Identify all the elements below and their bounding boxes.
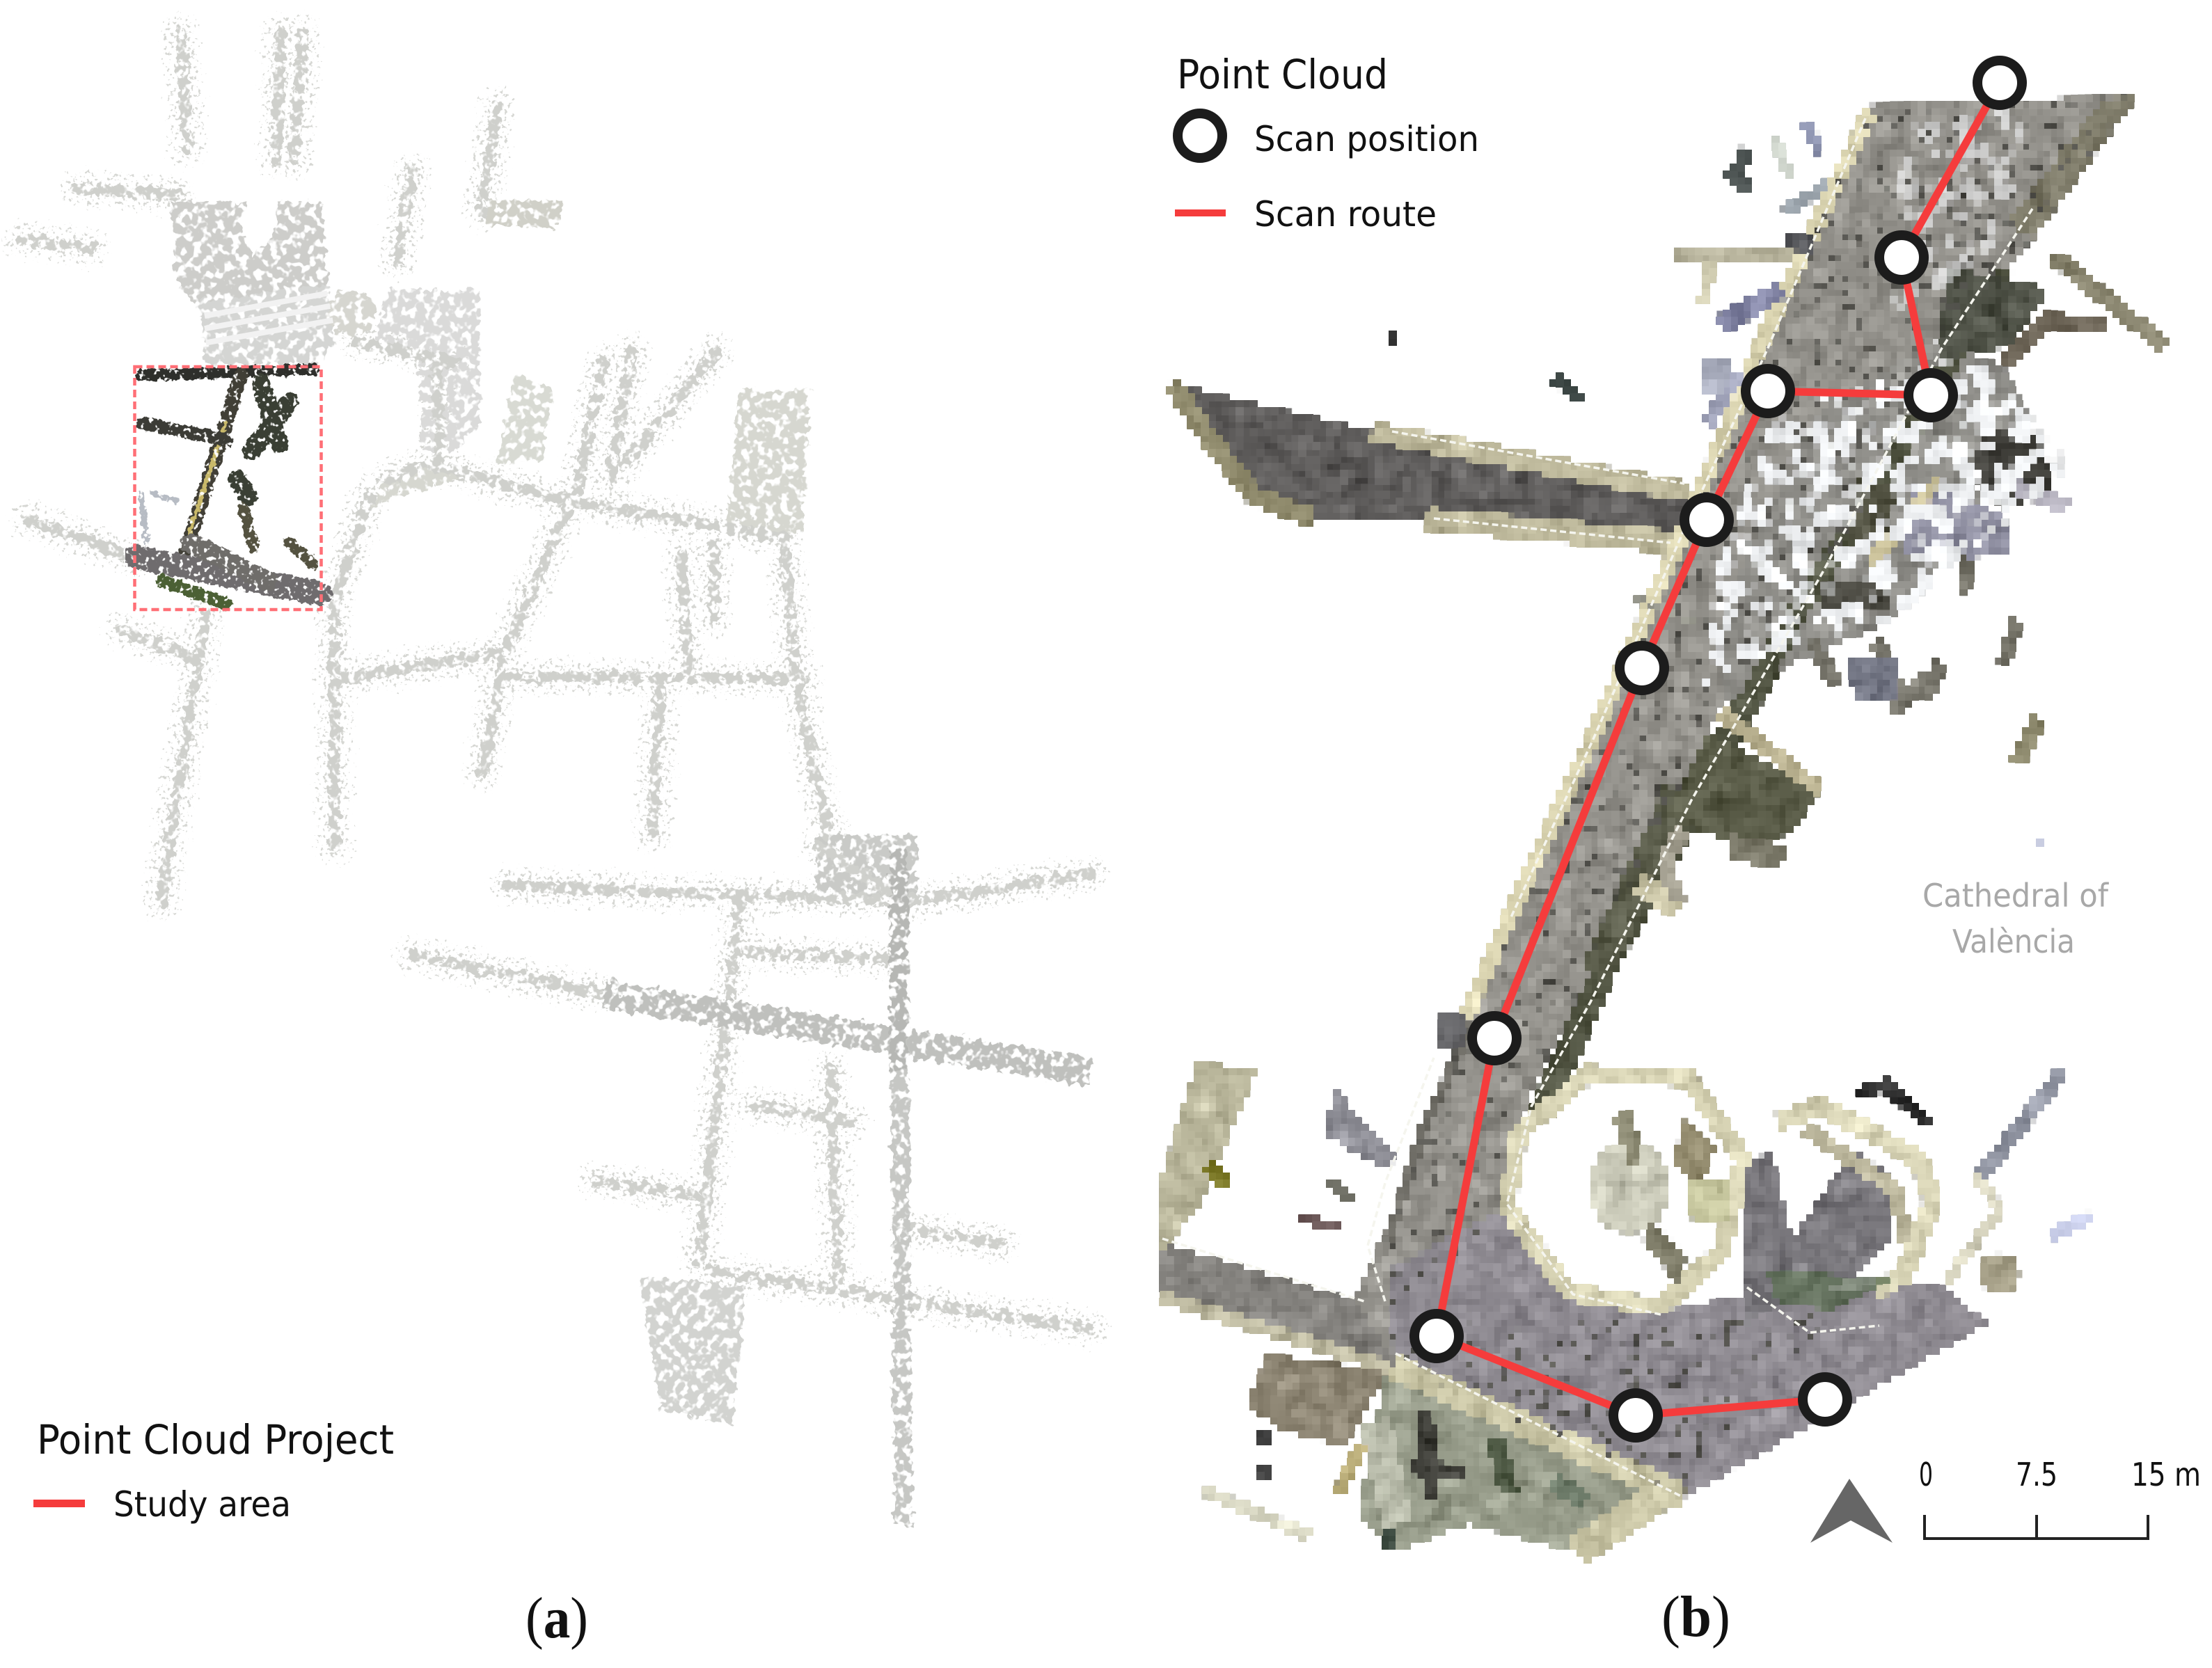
east mottled area [1723,341,2032,702]
vegetation strip [1540,268,2003,1114]
legend: point cloud [1175,51,1479,235]
grid fragment [1436,1012,1470,1047]
caption a: (a) [526,1586,588,1651]
white dashed kerb lines [1162,118,2032,1496]
octagon ring [1507,1073,1744,1308]
south-west buildings [1247,1356,1387,1445]
legend red line [33,1500,85,1507]
apse [1744,1150,1890,1326]
stair area [199,285,334,364]
plaza top [171,202,327,317]
dark speckles [1380,96,2138,1496]
block lower square [639,1276,746,1424]
floating fragments north [1730,148,1749,191]
scan positions [1414,61,2022,1438]
square upper right [725,389,809,533]
main street pavement [1354,96,2138,1367]
legend: point cloud project [33,1416,394,1525]
legend title: Point Cloud [1177,51,1388,98]
study area point cloud [136,370,320,603]
fountain blob [1590,1143,1669,1232]
west arm road [1169,381,1689,543]
north arrow [1810,1479,1893,1543]
mosaic point cloud [1162,96,2164,1551]
scale bar [1919,1456,2201,1539]
caption b: (b) [1661,1584,1730,1649]
round court [327,289,375,337]
thick diagonal and vertical avenues [603,994,1091,1072]
street network in grey [21,33,1091,1526]
legend scan position label: Scan position [1254,119,1479,159]
lower plaza pavement [1389,1207,1986,1496]
south-west road [1162,1244,1404,1375]
panel a: full point cloud project [21,33,1091,1526]
white speckles [1700,106,2073,691]
cathedral label: Cathedral of [1922,877,2110,914]
cathedral label: València [1952,923,2075,960]
stair stripes [205,294,333,343]
scan route [1437,83,2000,1415]
scale bar: 7.5 [2016,1456,2057,1493]
west kerb stripe [1467,113,1870,1015]
scattered faint points [21,33,1091,1328]
cathedral fragments [1812,639,1940,713]
scale bar: 15 m [2131,1456,2201,1493]
panel b: study area point cloud with scan route [1162,51,2201,1551]
scale bar: 0 [1919,1456,1933,1493]
study area dashed rectangle [135,367,322,610]
legend title: Point Cloud Project [37,1416,394,1463]
top right corner [2003,96,2138,240]
west fragments [1162,1063,1257,1250]
legend scan route label: Scan route [1254,194,1437,235]
legend route line [1175,209,1226,216]
legend ring symbol [1178,113,1222,158]
block near court [374,289,480,452]
cathedral label [1922,877,2110,960]
legend label: Study area [113,1484,291,1525]
